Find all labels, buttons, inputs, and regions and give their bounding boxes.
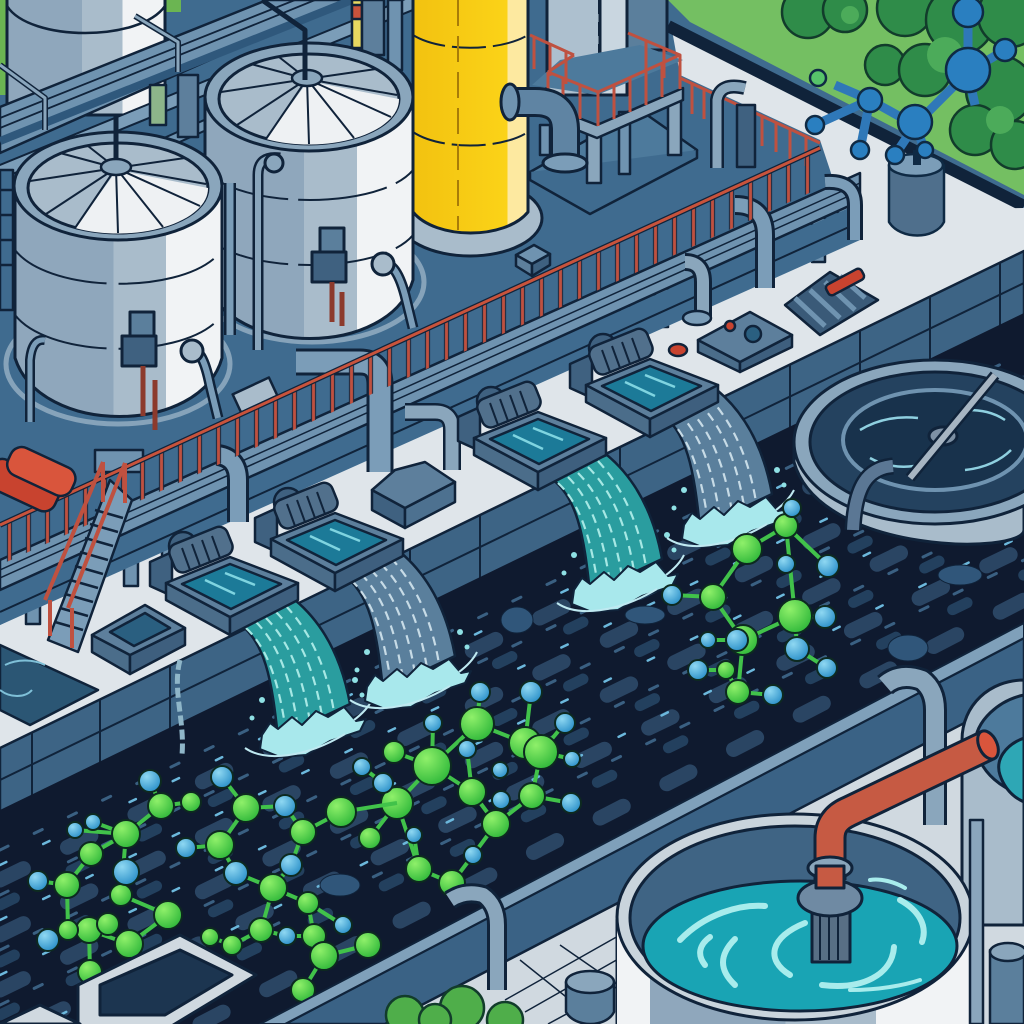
pipe: wall elbow right xyxy=(885,677,935,825)
slab: upper right xyxy=(672,30,1024,338)
lawn: top left slivers xyxy=(0,0,181,95)
pump block: right walkway xyxy=(785,267,878,335)
pipe: elbow from yellow stack xyxy=(501,84,587,172)
open basin: bottom left xyxy=(0,935,256,1024)
pipes and equipment: lower right corner xyxy=(970,820,1024,1024)
tank: turquoise water, lower right xyxy=(617,814,973,1024)
channel water xyxy=(0,313,1024,1024)
background uprights: behind centre tank xyxy=(0,0,402,310)
valve machinery: behind rail xyxy=(95,377,277,472)
waterfall: fourth, grey xyxy=(659,390,794,547)
channel wall: lower coping strip xyxy=(260,623,1024,1024)
clarifier: circular tank xyxy=(794,360,1024,544)
paved yard: lower right xyxy=(385,690,1024,1024)
molecule: blue structure on cylinder, top right xyxy=(806,0,1016,236)
waterfall: first, teal xyxy=(237,600,372,757)
tank: left xyxy=(6,115,230,430)
mixer box: fourth xyxy=(570,326,718,437)
tank: centre xyxy=(200,0,424,350)
small sump: left walkway xyxy=(92,605,185,674)
waterfall: third, teal xyxy=(549,455,684,612)
channel wall: lower xyxy=(285,638,1024,1024)
yellow stack xyxy=(398,0,542,256)
mixer box: second xyxy=(255,480,403,591)
pool: far left xyxy=(0,645,98,725)
water texture: blobs and ripples xyxy=(0,353,1024,1024)
red pipe and pump column xyxy=(798,728,1002,962)
molecule: left cluster xyxy=(28,766,397,1002)
red railing: upper platform xyxy=(530,33,820,166)
pipe risers and elbows xyxy=(218,86,855,522)
red valve: left edge xyxy=(0,443,79,515)
walkway: long slab along channel xyxy=(0,208,1024,748)
channel wall: upper xyxy=(0,251,1024,812)
waterfall: second, grey xyxy=(342,552,477,709)
small box: near platform xyxy=(516,245,550,276)
grey stack: back xyxy=(547,0,667,95)
control hut: centre xyxy=(372,462,455,528)
lawn: top right xyxy=(668,0,1024,195)
trees: top right xyxy=(782,0,1024,169)
small outfall trickle xyxy=(177,660,182,755)
molecule: middle cluster xyxy=(353,681,581,896)
pipe: wall elbow lower xyxy=(450,893,497,990)
control box and buttons: right walkway xyxy=(669,312,792,372)
boundary kerb: top right xyxy=(668,26,1024,206)
main pipe rack xyxy=(0,173,860,625)
mixer box: first xyxy=(150,524,298,635)
red railing: long xyxy=(0,148,820,565)
rack legs xyxy=(26,200,851,624)
tank: back left xyxy=(7,0,165,115)
platform: slab under stack xyxy=(530,45,697,214)
pipe: between tanks xyxy=(224,183,236,335)
small valve: lower yard xyxy=(566,971,614,1024)
mixer box: third xyxy=(458,379,606,490)
staircase with red rails xyxy=(45,462,132,652)
overhead pipe bundle: top left xyxy=(0,0,420,190)
tank: far right edge xyxy=(962,680,1024,925)
bushes: bottom centre xyxy=(386,986,523,1024)
molecule: right cluster xyxy=(662,499,839,705)
